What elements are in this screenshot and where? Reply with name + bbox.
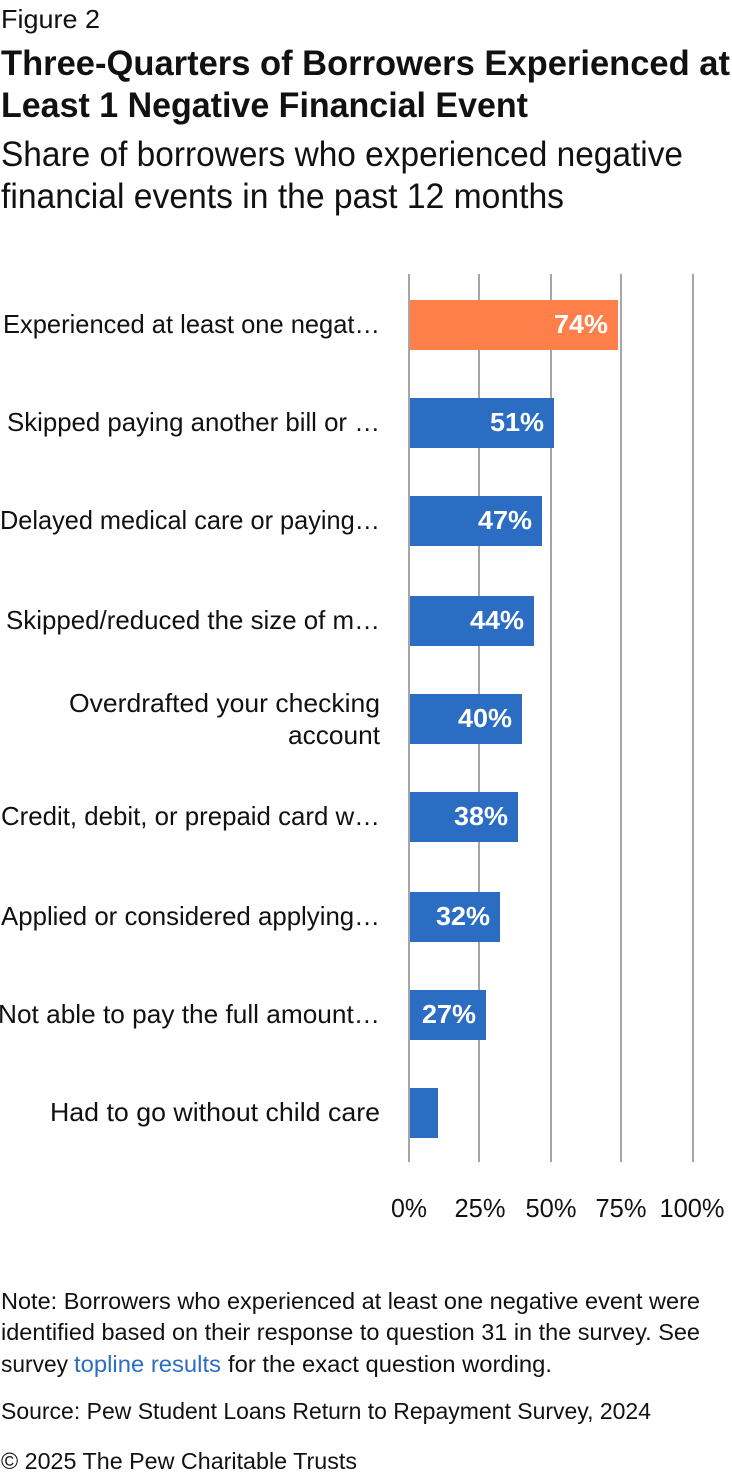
bar: applied or considered applying: Applied or considered applying…: [1, 901, 380, 931]
bar: not able to pay full amount: Not able to pay the full amount…: [0, 999, 380, 1029]
x axis labels: 25%: [454, 1193, 506, 1223]
note: topline results: [74, 1351, 221, 1377]
bar: skipped or reduced meals: Skipped/reduced the size of m…: [6, 605, 380, 635]
x axis labels: 100%: [660, 1193, 724, 1223]
bar: at least one negative event: [3, 300, 618, 350]
bar: delayed medical care: [0, 496, 542, 546]
copyright: © 2025 The Pew Charitable Trusts: [1, 1448, 357, 1474]
title: Three-Quarters of Borrowers Experienced at: [1, 44, 730, 83]
bar: without child care: [50, 1088, 438, 1138]
bar: without child care: Had to go without child care: [50, 1097, 380, 1127]
bar chart: [0, 274, 724, 1223]
source: Source: Pew Student Loans Return to Repayment Survey, 2024: [1, 1398, 651, 1424]
figure label: Figure 2: [1, 4, 100, 34]
bar: applied or considered applying: 32%: [436, 901, 490, 931]
bar: skipped paying bill: Skipped paying another bill or …: [7, 407, 380, 437]
subtitle: Share of borrowers who experienced negative: [1, 135, 683, 174]
bar: delayed medical care: Delayed medical care or paying…: [0, 505, 380, 535]
note: Note: Borrowers who experienced at least one negative event were: [1, 1288, 700, 1314]
bar: applied or considered applying: [1, 892, 500, 942]
x axis labels: [391, 1193, 724, 1223]
bar: overdrafted checking: account: [288, 720, 381, 750]
bar: overdrafted checking: [69, 688, 522, 750]
x axis labels: 50%: [526, 1193, 576, 1223]
x axis labels: 0%: [391, 1193, 427, 1223]
note: survey: [1, 1351, 68, 1377]
subtitle: financial events in the past 12 months: [1, 177, 564, 216]
note: [1, 1288, 700, 1377]
note: for the exact question wording.: [228, 1351, 552, 1377]
note: identified based on their response to question 31 in the survey. See: [1, 1319, 700, 1345]
bar: delayed medical care: 47%: [478, 505, 532, 535]
bar: skipped paying bill: 51%: [490, 407, 544, 437]
bar: overdrafted checking: 40%: [458, 703, 512, 733]
bar: overdrafted checking: Overdrafted your checking: [69, 688, 380, 718]
bar: not able to pay full amount: [0, 990, 486, 1040]
x axis labels: 75%: [596, 1193, 646, 1223]
bar: card declined: Credit, debit, or prepaid card w…: [1, 801, 380, 831]
subtitle: [1, 135, 683, 216]
bar: card declined: 38%: [454, 801, 508, 831]
bar: not able to pay full amount: 27%: [422, 999, 476, 1029]
title: [1, 44, 730, 125]
bar: skipped or reduced meals: 44%: [470, 605, 524, 635]
title: Least 1 Negative Financial Event: [1, 86, 528, 125]
bar: at least one negative event: 74%: [554, 309, 608, 339]
bar: skipped or reduced meals: [6, 596, 534, 646]
bar: at least one negative event: Experienced at least one negat…: [3, 309, 380, 339]
bar: card declined: [1, 792, 518, 842]
bar: skipped paying bill: [7, 398, 554, 448]
